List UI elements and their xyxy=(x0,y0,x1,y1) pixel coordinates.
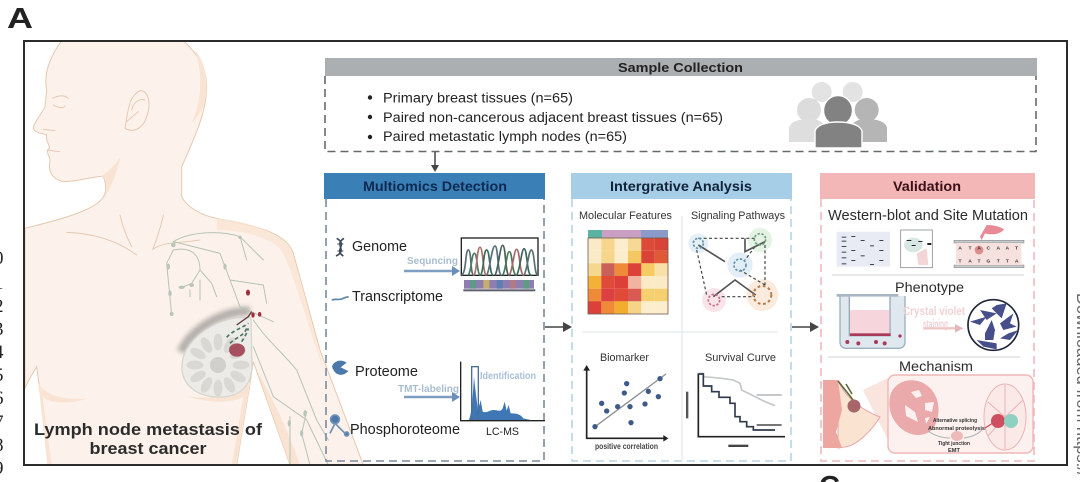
arrow: multiomics to integrative xyxy=(545,322,572,332)
mechanism tissue panel xyxy=(888,375,1033,453)
scatter label: positive correlation xyxy=(595,441,658,451)
body silhouette xyxy=(25,41,363,465)
DNA site mutation: A xyxy=(1015,258,1019,264)
DNA site mutation: A xyxy=(997,245,1001,251)
icon: group of people xyxy=(789,82,887,148)
DNA site mutation xyxy=(954,225,1024,268)
DNA site mutation: T xyxy=(977,258,981,264)
icon: phosphoprotein xyxy=(330,415,349,436)
integrative labels: Biomarker xyxy=(600,352,649,364)
DNA site mutation: A xyxy=(977,245,981,251)
validation section labels xyxy=(828,208,1028,374)
arrow: sequencing: Sequncing xyxy=(407,255,458,267)
transwell xyxy=(837,294,905,348)
integrative heading: Intergrative Analysis xyxy=(610,179,752,194)
survival curve xyxy=(686,373,785,447)
DNA site mutation: A xyxy=(968,258,972,264)
arrow: crystal violet xyxy=(923,324,963,333)
omics labels: Proteome xyxy=(355,364,418,380)
stain label: staining xyxy=(923,317,948,331)
western blot xyxy=(837,232,890,267)
arrow: sample to multiomics xyxy=(431,152,439,172)
omics labels: Phosphoroteome xyxy=(350,422,460,438)
margin line numbers xyxy=(0,248,4,479)
sample collection heading xyxy=(325,58,1037,76)
sample list xyxy=(368,90,723,144)
omics labels: Genome xyxy=(352,239,407,255)
scatter plot xyxy=(583,365,668,442)
stained cells circle xyxy=(968,300,1019,350)
omics labels: Transcriptome xyxy=(352,289,443,305)
title: lymph node metastasis: breast cancer xyxy=(90,440,207,458)
omics labels xyxy=(350,239,460,438)
mechanism labels: Abnormal proteolysis xyxy=(928,426,985,432)
mechanism labels: Alternative splicing xyxy=(933,418,977,424)
DNA site mutation: C xyxy=(987,245,991,251)
DNA site mutation: A xyxy=(1006,245,1010,251)
site mutation blot xyxy=(901,230,932,268)
multiomics heading: Multiomics Detection xyxy=(363,179,507,194)
DNA site mutation: T xyxy=(997,258,1000,264)
DNA site mutation: T xyxy=(958,258,962,264)
validation heading xyxy=(820,173,1035,199)
heatmap xyxy=(588,230,668,314)
icon: protein xyxy=(332,361,348,375)
panel: multiomics detection xyxy=(324,173,545,461)
integrative dashed box xyxy=(572,199,791,461)
icon: dna xyxy=(336,238,344,256)
body shading xyxy=(38,50,325,465)
sample list: Primary breast tissues (n=65) xyxy=(383,90,573,106)
multiomics dashed box xyxy=(326,199,544,461)
integrative labels: Survival Curve xyxy=(705,352,776,364)
DNA site mutation: T xyxy=(1015,245,1018,251)
panel: multiomics detection: LC-MS xyxy=(486,426,519,438)
chromatogram labels: Identification xyxy=(480,370,536,382)
panel: sample collection xyxy=(325,58,1037,152)
DNA site mutation: T xyxy=(968,245,972,251)
validation section labels: Western-blot and Site Mutation xyxy=(828,208,1028,224)
mechanism breast section xyxy=(823,378,888,448)
validation dashed box xyxy=(821,199,1034,461)
DNA site mutation: G xyxy=(986,258,990,264)
LC-MS chromatogram xyxy=(461,362,545,421)
face and collarbone lines xyxy=(43,91,200,255)
arrow: TMT-labeling xyxy=(398,383,460,402)
breast with lobules xyxy=(181,311,252,397)
sample dashed box xyxy=(325,76,1036,152)
tumor with metastatic cells xyxy=(227,290,261,357)
validation section labels: Phenotype xyxy=(895,280,964,295)
icon: transcript strand xyxy=(332,297,349,300)
title: lymph node metastasis: Lymph node metastasis of xyxy=(34,421,263,439)
panel letter A: A xyxy=(7,3,33,35)
validation section labels: Mechanism xyxy=(899,359,973,374)
lymphatic vessels xyxy=(167,233,328,465)
mechanism labels: EMT xyxy=(948,448,961,454)
stain label xyxy=(903,304,965,331)
arrow: TMT-labeling: TMT-labeling xyxy=(398,383,459,395)
arrow: integrative to validation xyxy=(792,322,819,332)
integrative labels: Signaling Pathways xyxy=(691,210,785,222)
mechanism labels: Tight junction xyxy=(938,441,971,447)
validation heading: Validation xyxy=(893,179,961,194)
DNA site mutation: T xyxy=(1006,258,1009,264)
body illustration xyxy=(25,41,363,465)
multiomics heading xyxy=(324,173,545,199)
arrow: sequencing xyxy=(404,255,460,276)
signaling network xyxy=(688,228,778,312)
sequencing chromatogram xyxy=(461,238,538,291)
sample collection heading: Sample Collection xyxy=(618,60,743,75)
integrative heading xyxy=(571,173,792,199)
panel: integrative analysis xyxy=(571,173,792,462)
integrative labels: Molecular Features xyxy=(579,210,672,222)
sample list: Paired non-cancerous adjacent breast tissues (n=65) xyxy=(383,110,723,125)
integrative labels xyxy=(579,210,785,364)
stain label: Crystal violet xyxy=(903,304,965,318)
sample list: Paired metastatic lymph nodes (n=65) xyxy=(383,129,627,144)
title: lymph node metastasis xyxy=(34,421,263,458)
mechanism labels xyxy=(928,418,985,454)
panel: validation xyxy=(820,173,1035,461)
DNA site mutation: A xyxy=(958,245,962,251)
